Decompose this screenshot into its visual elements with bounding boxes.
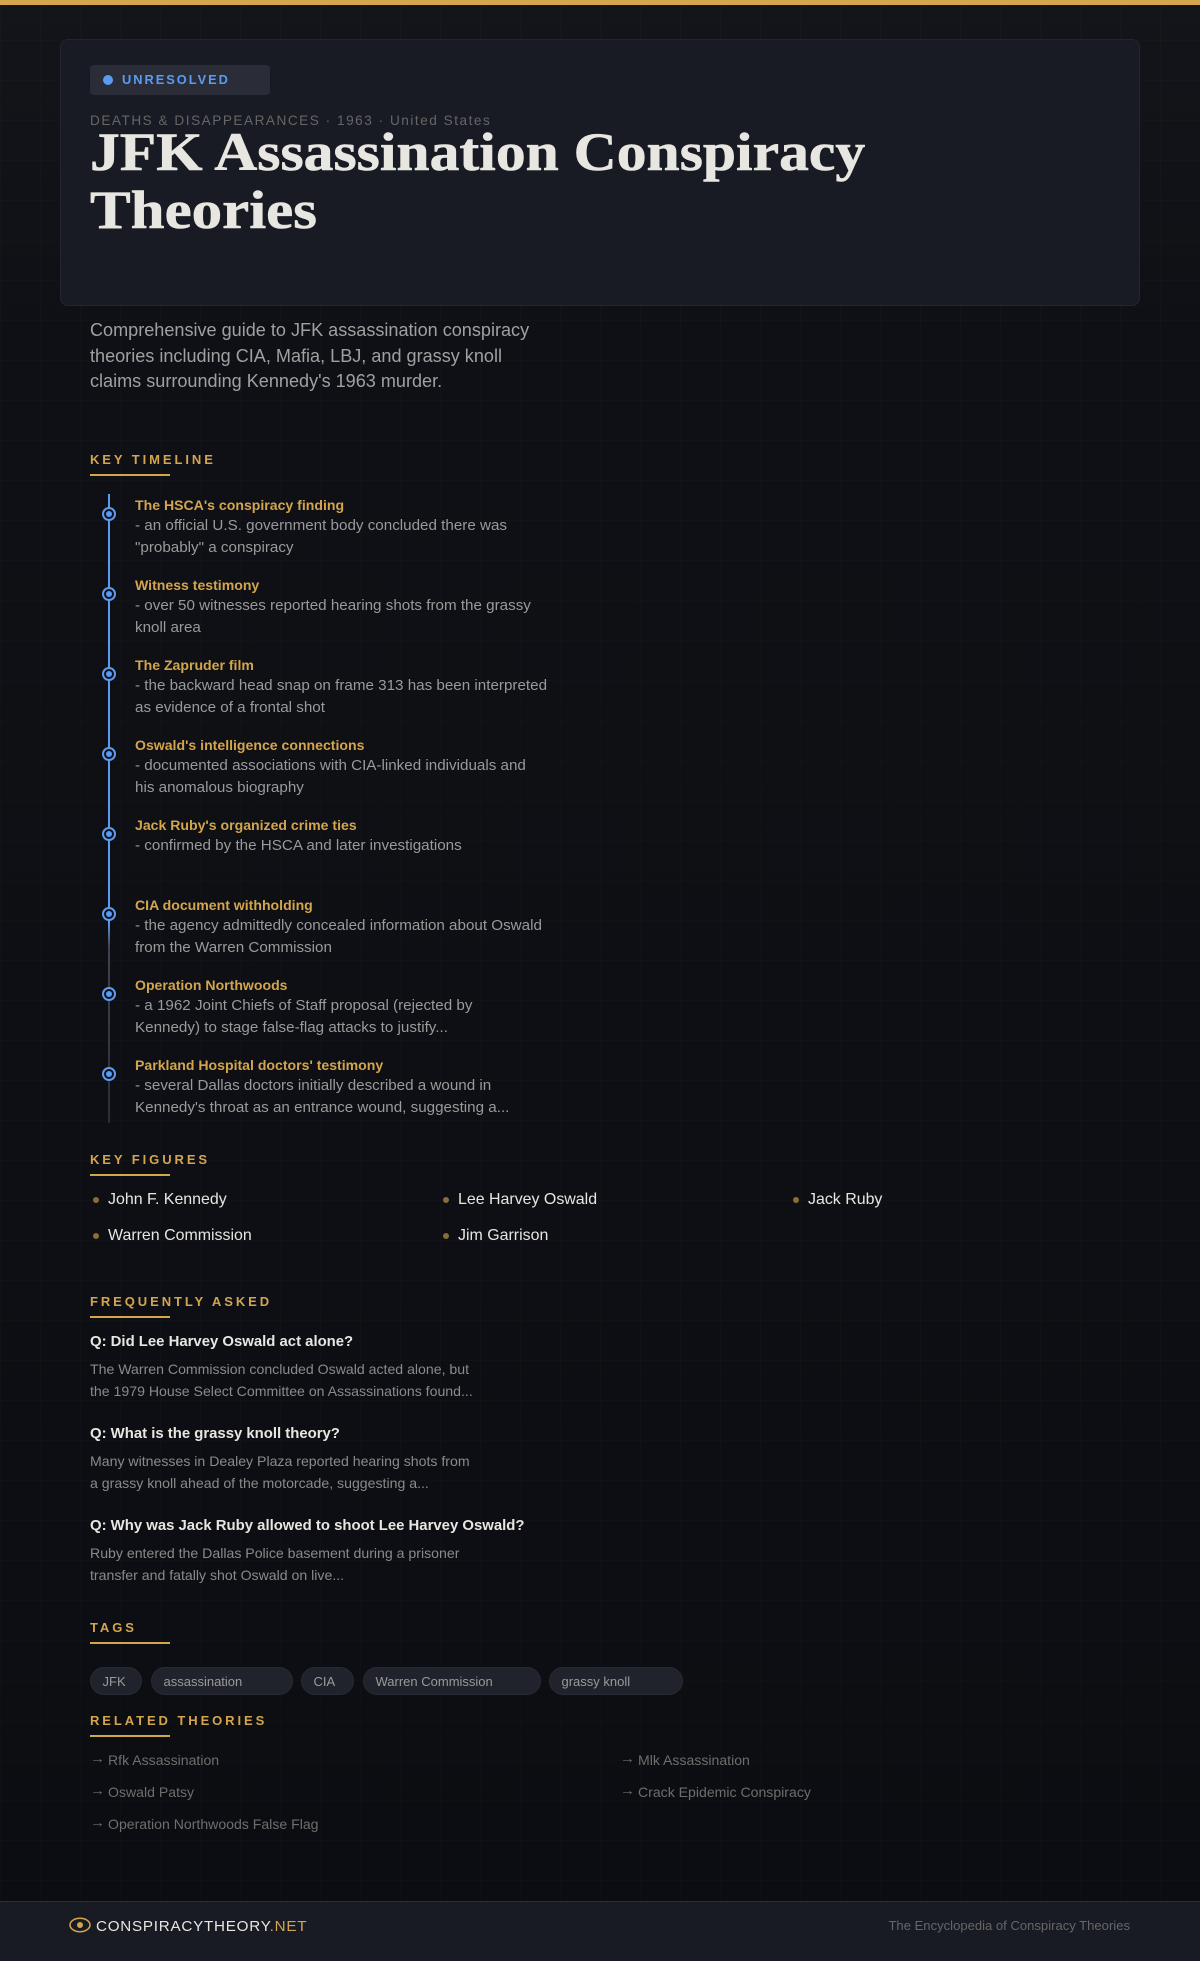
description: claims surrounding Kennedy's 1963 murder. — [90, 371, 442, 391]
status badge — [90, 65, 270, 95]
timeline marker 4 — [102, 747, 116, 761]
timeline event 8: - several Dallas doctors initially described a wound in — [135, 1077, 491, 1094]
timeline event 1 — [135, 497, 507, 556]
title — [90, 122, 865, 240]
timeline marker 7 — [102, 987, 116, 1001]
timeline event 8 — [135, 1057, 509, 1116]
timeline event 4: Oswald's intelligence connections — [135, 737, 364, 753]
timeline marker 8 — [102, 1067, 116, 1081]
heading: key figures: KEY FIGURES — [90, 1152, 210, 1167]
timeline event 3: - the backward head snap on frame 313 has been interpreted — [135, 677, 547, 694]
faq 2 — [90, 1426, 470, 1491]
timeline event 5 — [135, 817, 462, 854]
faq 2: Many witnesses in Dealey Plaza reported hearing shots from — [90, 1453, 470, 1469]
tag: Warren Commission: Warren Commission — [376, 1674, 493, 1689]
wordmark: CONSPIRACYTHEORY.NET — [96, 1918, 307, 1935]
icon: eye logo — [69, 1918, 91, 1932]
figure: Warren Commission: Warren Commission — [108, 1227, 252, 1244]
tag: CIA: CIA — [314, 1674, 335, 1689]
timeline marker 1 — [102, 507, 116, 521]
faq 3: transfer and fatally shot Oswald on live... — [90, 1567, 344, 1583]
faq 1: The Warren Commission concluded Oswald acted alone, but — [90, 1361, 469, 1377]
footer tagline: The Encyclopedia of Conspiracy Theories — [888, 1918, 1130, 1933]
icon: status dot — [103, 75, 113, 85]
tag: assassination — [151, 1667, 293, 1695]
faq 2: Q: What is the grassy knoll theory? — [90, 1426, 340, 1442]
tag: JFK — [90, 1667, 142, 1695]
timeline event 7: Kennedy) to stage false-flag attacks to justify... — [135, 1019, 448, 1036]
timeline event 2 — [135, 577, 531, 636]
figure: Jim Garrison: Jim Garrison — [458, 1227, 548, 1244]
timeline event 2: Witness testimony — [135, 577, 259, 593]
description: Comprehensive guide to JFK assassination conspiracy — [90, 320, 529, 340]
tag: grassy knoll: grassy knoll — [562, 1674, 630, 1689]
tag: Warren Commission — [363, 1667, 541, 1695]
description — [90, 320, 530, 391]
timeline marker 2 — [102, 587, 116, 601]
tag: CIA — [301, 1667, 354, 1695]
timeline event 1: The HSCA's conspiracy finding — [135, 497, 344, 513]
timeline event 6 — [135, 897, 542, 956]
timeline event 7 — [135, 977, 472, 1036]
category meta line: DEATHS & DISAPPEARANCES · 1963 · United States — [90, 113, 491, 128]
timeline event 2: - over 50 witnesses reported hearing shots from the grassy — [135, 597, 531, 614]
timeline event 4: - documented associations with CIA-linked individuals and — [135, 757, 526, 774]
tag: JFK: JFK — [102, 1674, 126, 1689]
related: Crack Epidemic Conspiracy: → — [620, 1782, 635, 1798]
related: Oswald Patsy: Oswald Patsy — [108, 1784, 194, 1800]
timeline event 6: from the Warren Commission — [135, 939, 332, 956]
title: Theories — [90, 180, 317, 240]
faq 3 — [90, 1518, 524, 1583]
faq 3: Ruby entered the Dallas Police basement during a prisoner — [90, 1545, 459, 1561]
faq 1: Q: Did Lee Harvey Oswald act alone? — [90, 1334, 353, 1350]
timeline spine — [108, 494, 110, 1123]
panel: header card — [60, 39, 1140, 306]
timeline event 2: knoll area — [135, 619, 201, 636]
related: Mlk Assassination: → — [620, 1750, 635, 1766]
top accent bar — [0, 0, 1200, 5]
timeline event 8: Kennedy's throat as an entrance wound, suggesting a... — [135, 1099, 509, 1116]
timeline event 3: The Zapruder film — [135, 657, 254, 673]
timeline event 1: "probably" a conspiracy — [135, 539, 294, 556]
figure: Jack Ruby: Jack Ruby — [808, 1191, 882, 1208]
timeline event 6: - the agency admittedly concealed information about Oswald — [135, 917, 542, 934]
related: Oswald Patsy: → — [90, 1782, 105, 1798]
footer — [0, 1901, 1200, 1961]
timeline event 8: Parkland Hospital doctors' testimony — [135, 1057, 383, 1073]
timeline event 7: - a 1962 Joint Chiefs of Staff proposal (rejected by — [135, 997, 472, 1014]
heading: key timeline: KEY TIMELINE — [90, 452, 216, 467]
faq 1: the 1979 House Select Committee on Assassinations found... — [90, 1383, 473, 1399]
heading: related theories: RELATED THEORIES — [90, 1713, 267, 1728]
related: Mlk Assassination: Mlk Assassination — [638, 1752, 750, 1768]
timeline event 3: as evidence of a frontal shot — [135, 699, 325, 716]
faq 3: Q: Why was Jack Ruby allowed to shoot Lee Harvey Oswald? — [90, 1518, 524, 1534]
heading: tags: TAGS — [90, 1620, 137, 1635]
related: Operation Northwoods False Flag: Operation Northwoods False Flag — [108, 1816, 318, 1832]
timeline event 4: his anomalous biography — [135, 779, 304, 796]
figure: Lee Harvey Oswald: Lee Harvey Oswald — [458, 1191, 597, 1208]
timeline event 6: CIA document withholding — [135, 897, 313, 913]
timeline event 7: Operation Northwoods — [135, 977, 288, 993]
tag: assassination: assassination — [164, 1674, 242, 1689]
tag: grassy knoll — [549, 1667, 683, 1695]
related: Rfk Assassination: → — [90, 1750, 105, 1766]
timeline event 5: - confirmed by the HSCA and later investigations — [135, 837, 462, 854]
timeline event 1: - an official U.S. government body concluded there was — [135, 517, 507, 534]
badge label: UNRESOLVED — [122, 72, 230, 87]
heading: frequently asked: FREQUENTLY ASKED — [90, 1294, 272, 1309]
timeline marker 3 — [102, 667, 116, 681]
faq 1 — [90, 1334, 473, 1399]
related: Crack Epidemic Conspiracy: Crack Epidemic Conspiracy — [638, 1784, 811, 1800]
related: Rfk Assassination: Rfk Assassination — [108, 1752, 219, 1768]
timeline marker 6 — [102, 907, 116, 921]
timeline event 3 — [135, 657, 547, 716]
timeline event 4 — [135, 737, 526, 796]
faq 2: a grassy knoll ahead of the motorcade, suggesting a... — [90, 1475, 429, 1491]
timeline event 5: Jack Ruby's organized crime ties — [135, 817, 357, 833]
title: JFK Assassination Conspiracy — [90, 122, 865, 182]
timeline marker 5 — [102, 827, 116, 841]
description: theories including CIA, Mafia, LBJ, and grassy knoll — [90, 346, 502, 366]
figure: John F. Kennedy: John F. Kennedy — [108, 1191, 227, 1208]
related: Operation Northwoods False Flag: → — [90, 1814, 105, 1830]
